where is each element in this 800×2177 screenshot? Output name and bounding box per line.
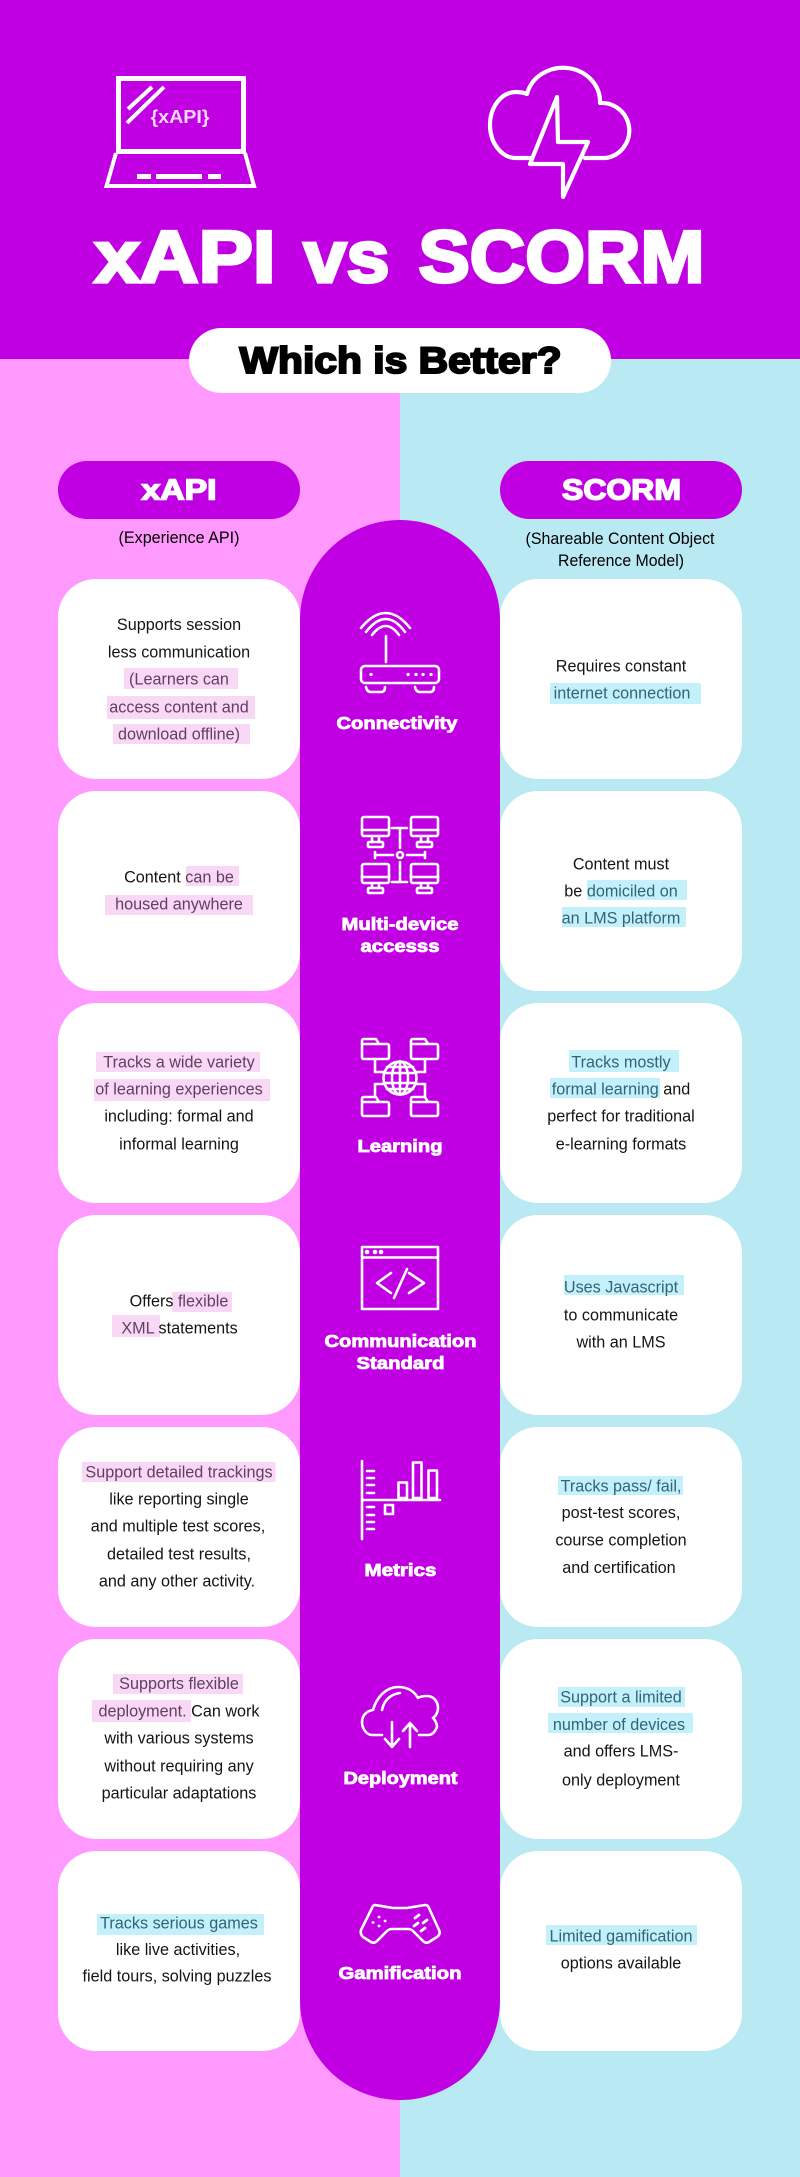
icon: networked computers (362, 817, 438, 893)
panel: metrics SCORM (500, 1427, 742, 1627)
icon: wifi router (361, 613, 439, 692)
panel: connectivity SCORM: Requires constant (556, 658, 687, 676)
panel: multi-device xAPI: Content can be (124, 868, 234, 886)
panel: metrics xAPI: and any other activity. (99, 1572, 255, 1590)
panel: multi-device xAPI: housed anywhere (115, 896, 243, 914)
panel: multi-device SCORM (500, 791, 742, 991)
icon: cloud upload and download (362, 1687, 438, 1747)
panel: connectivity SCORM (500, 579, 742, 779)
title: vs (304, 217, 390, 298)
panel: communication SCORM: with an LMS (575, 1334, 666, 1352)
icon: bar chart metrics (362, 1461, 440, 1539)
panel: deployment xAPI: deployment. Can work (98, 1702, 260, 1720)
label: metrics: Metrics (364, 1560, 437, 1580)
panel: learning SCORM (500, 1003, 742, 1203)
label: communication standard (324, 1331, 476, 1373)
panel: connectivity xAPI (58, 579, 300, 779)
SCORM full name: Reference Model) (558, 552, 684, 570)
panel: metrics xAPI: detailed test results, (107, 1546, 251, 1564)
panel: communication SCORM (500, 1215, 742, 1415)
label: connectivity: Connectivity (336, 713, 458, 733)
panel: deployment SCORM: only deployment (562, 1772, 680, 1790)
panel: multi-device SCORM: an LMS platform (562, 910, 680, 928)
icon: code window (362, 1247, 438, 1309)
label: learning: Learning (358, 1136, 442, 1156)
panel: multi-device SCORM: Content must (573, 856, 670, 874)
SCORM full name (526, 530, 715, 570)
panel: metrics xAPI (58, 1427, 300, 1627)
panel: metrics SCORM: and certification (562, 1559, 676, 1577)
SCORM full name: (Shareable Content Object (526, 530, 715, 548)
title: xAPI (94, 217, 276, 298)
panel: connectivity xAPI: access content and (109, 698, 249, 716)
subtitle pill: Which is Better? (240, 340, 562, 381)
panel: communication xAPI (58, 1215, 300, 1415)
panel: communication xAPI: Offers flexible (130, 1292, 228, 1310)
icon: laptop with xAPI (106, 78, 254, 186)
panel: multi-device xAPI (58, 791, 300, 991)
panel: connectivity xAPI: less communication (108, 644, 250, 662)
title: SCORM (418, 217, 704, 298)
panel: metrics xAPI: Support detailed trackings (85, 1464, 273, 1482)
label: deployment: Deployment (344, 1768, 458, 1788)
panel: deployment xAPI: without requiring any (103, 1758, 255, 1776)
panel: learning xAPI: including: formal and (104, 1108, 254, 1126)
panel: deployment SCORM: number of devices (553, 1716, 685, 1734)
label: communication standard: Communication (324, 1331, 476, 1351)
panel: metrics SCORM: post-test scores, (562, 1504, 680, 1522)
title (94, 217, 704, 298)
panel: metrics SCORM: Tracks pass/ fail, (561, 1478, 681, 1496)
panel: communication SCORM: Uses Javascript (564, 1278, 679, 1296)
panel: learning SCORM: formal learning and (552, 1080, 690, 1098)
panel: learning xAPI: of learning experiences (95, 1080, 263, 1098)
icon: game controller (361, 1905, 440, 1943)
panel: connectivity xAPI: Supports session (117, 616, 241, 634)
panel: connectivity xAPI: download offline) (118, 726, 240, 744)
label: multi-device access: Multi-device (342, 914, 459, 934)
panel: gamification SCORM: Limited gamification (549, 1928, 693, 1946)
panel: gamification xAPI: Tracks serious games (100, 1914, 258, 1932)
panel: deployment SCORM (500, 1639, 742, 1839)
panel: gamification SCORM: options available (561, 1954, 681, 1972)
central column (300, 520, 500, 2100)
panel: deployment xAPI (58, 1639, 300, 1839)
panel: learning SCORM: e-learning formats (556, 1136, 686, 1154)
panel: learning xAPI: informal learning (119, 1136, 239, 1154)
panel: gamification xAPI (58, 1851, 300, 2051)
panel: communication xAPI: XML statements (121, 1320, 238, 1338)
panel: multi-device SCORM: be domiciled on (564, 882, 678, 900)
label: communication standard: Standard (356, 1353, 444, 1373)
panel: deployment xAPI: with various systems (103, 1730, 254, 1748)
panel: connectivity SCORM: internet connection (554, 684, 690, 702)
panel: gamification SCORM (500, 1851, 742, 2051)
subtitle pill (189, 328, 611, 393)
panel: metrics xAPI: like reporting single (109, 1490, 249, 1508)
xAPI full name: (Experience API) (118, 529, 240, 547)
panel: gamification xAPI: like live activities, (116, 1941, 240, 1959)
panel: deployment xAPI: particular adaptations (102, 1784, 256, 1802)
heading: SCORM (500, 461, 742, 519)
panel: learning SCORM: perfect for traditional (547, 1108, 695, 1126)
panel: deployment SCORM: and offers LMS- (564, 1742, 678, 1760)
panel: deployment SCORM: Support a limited (560, 1688, 682, 1706)
icon: globe with folders (362, 1039, 438, 1116)
panel: deployment xAPI: Supports flexible (119, 1675, 239, 1693)
label: multi-device access: accesss (360, 936, 440, 956)
label: multi-device access (342, 914, 459, 956)
heading: SCORM: SCORM (562, 474, 681, 506)
heading: xAPI (58, 461, 300, 519)
panel: learning xAPI: Tracks a wide variety (103, 1054, 256, 1072)
icon: cloud with lightning bolt (490, 68, 629, 197)
panel: metrics xAPI: and multiple test scores, (91, 1518, 265, 1536)
label: gamification: Gamification (338, 1963, 462, 1983)
icon: laptop with xAPI: {xAPI} (150, 107, 210, 127)
panel: learning SCORM: Tracks mostly (571, 1054, 672, 1072)
panel: learning xAPI (58, 1003, 300, 1203)
panel: connectivity xAPI: (Learners can (129, 670, 229, 688)
panel: gamification xAPI: field tours, solving puzzles (83, 1968, 271, 1986)
panel: communication SCORM: to communicate (564, 1306, 678, 1324)
panel: metrics SCORM: course completion (555, 1532, 687, 1550)
heading: xAPI: xAPI (142, 474, 216, 506)
